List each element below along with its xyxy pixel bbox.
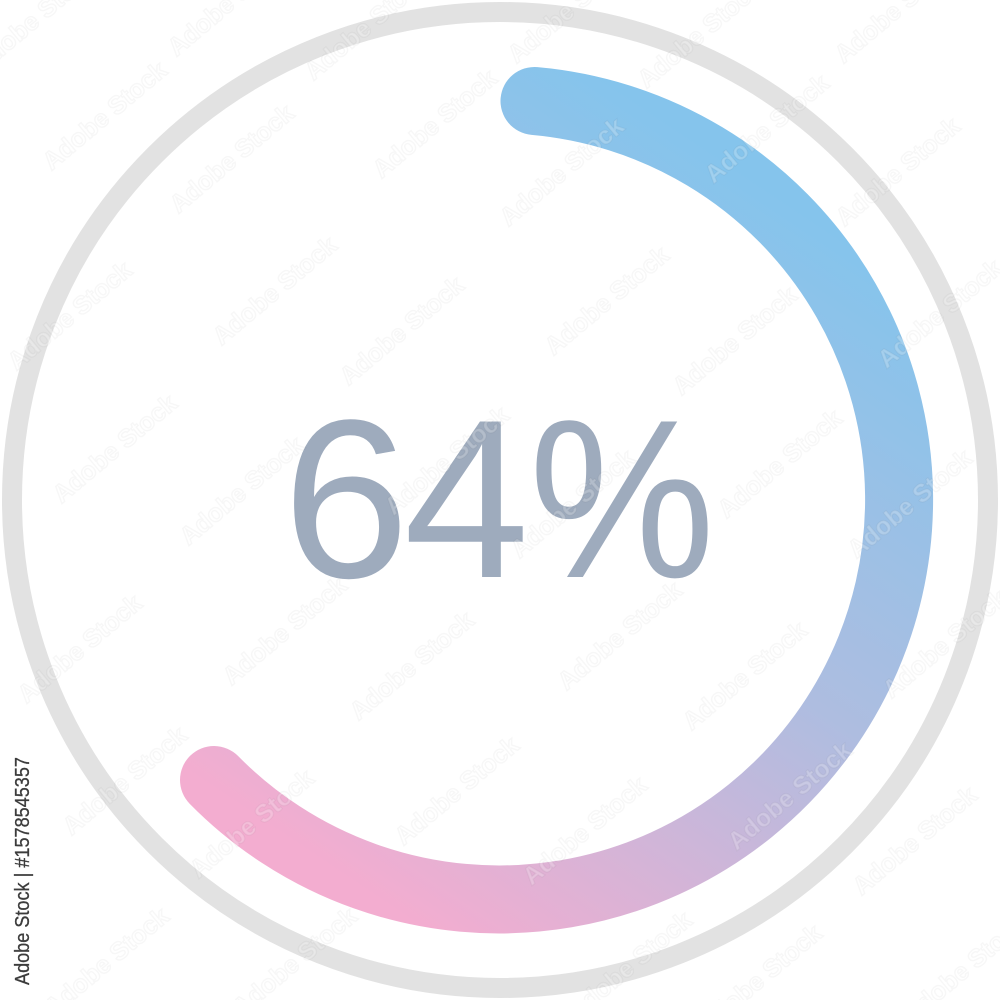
faint repeated watermark: Adobe Stock [37,56,172,176]
faint repeated watermark: Adobe Stock [367,64,502,184]
faint repeated watermark: Adobe Stock [842,444,977,564]
faint repeated watermark: Adobe Stock [164,99,299,219]
percentage label: % [529,372,715,625]
faint repeated watermark: Adobe Stock [389,731,524,851]
faint repeated watermark: Adobe Stock [57,721,192,841]
faint repeated watermark: Adobe Stock [12,589,147,709]
faint repeated watermark: Adobe Stock [722,736,857,856]
faint repeated watermark: Adobe Stock [344,606,479,726]
faint repeated watermark: Adobe Stock [517,771,652,891]
faint repeated watermark: Adobe Stock [667,281,802,401]
faint repeated watermark: Adobe Stock [207,231,342,351]
faint repeated watermark: Adobe Stock [2,256,137,376]
faint repeated watermark: Adobe Stock [334,271,469,391]
faint repeated watermark: Adobe Stock [677,616,812,736]
percentage label: 4 [404,372,529,625]
faint repeated watermark: Adobe Stock [217,571,352,691]
progress arc 64% [214,101,899,899]
faint repeated watermark: Adobe Stock [712,404,847,524]
faint repeated watermark: Adobe Stock [830,112,965,232]
faint repeated watermark: Adobe Stock [505,444,640,564]
faint repeated watermark: Adobe Stock [699,69,834,189]
percentage label [282,372,715,625]
faint repeated watermark: Adobe Stock [47,389,182,509]
faint repeated watermark: Adobe Stock [847,781,982,901]
vertical stock id caption: Adobe Stock | #1578545357 [12,757,34,985]
faint repeated watermark: Adobe Stock [174,431,309,551]
faint repeated watermark: Adobe Stock [379,401,514,521]
faint repeated watermark: Adobe Stock [539,241,674,361]
faint repeated watermark: Adobe Stock [184,764,319,884]
faint repeated watermark: Adobe Stock [552,576,687,696]
percentage label: 6 [282,372,410,625]
faint repeated watermark: Adobe Stock [494,112,629,232]
